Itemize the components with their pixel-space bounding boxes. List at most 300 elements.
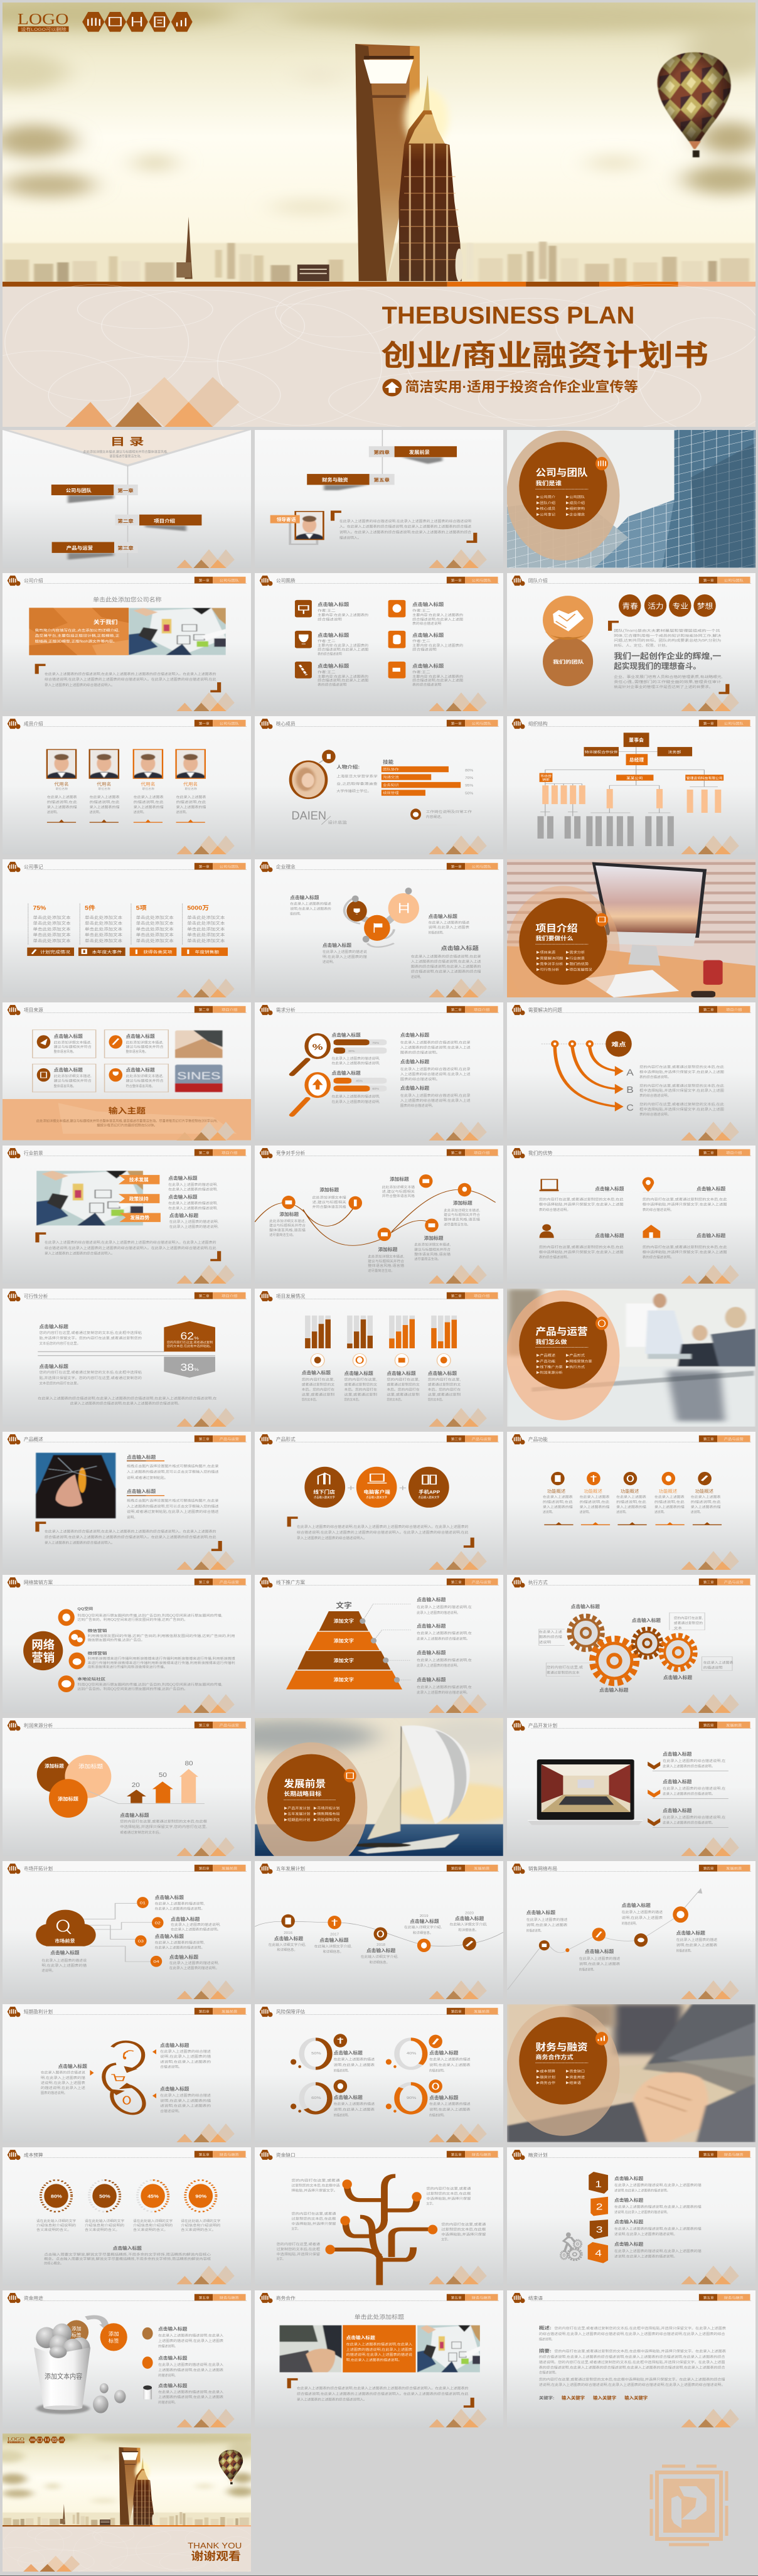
member bios: 述说明。 <box>134 810 146 814</box>
slide: competitor analysis <box>255 1146 503 1284</box>
pyramid text: 此录入上述图表的综合描述说明。 <box>417 1636 470 1641</box>
milestone lines: 单击此处添加文本 <box>187 932 225 937</box>
member bios: 的描述说明,在此 <box>90 800 120 804</box>
description text: 录入上述图表的上述图表的综合描述说明入。 <box>45 682 115 687</box>
item text col 1: 作者:王二 <box>318 639 336 643</box>
difficulty badge: 难点 <box>611 1041 626 1048</box>
header: 项目来源 <box>24 1007 43 1013</box>
text block 2 <box>429 914 469 935</box>
team circles <box>543 596 593 686</box>
slide: company introduction <box>3 573 251 711</box>
photo: handshake <box>507 2004 755 2142</box>
section list: ▶组织架构 <box>565 507 585 511</box>
section list: ▶利润来源分析 <box>536 1371 563 1375</box>
function text: 在此录入上述图表 <box>691 1495 721 1499</box>
budget summary <box>44 2245 211 2265</box>
milestone buttons <box>27 948 228 956</box>
channel text lower: 达到广告目的。利用QQ空间来进行朋友圈间的传播,达到广告目的。 <box>77 1687 188 1691</box>
profit text: 在此录入上述图表的综合描述 <box>160 2049 211 2054</box>
pyramid text: 在此录入上述图表的描述说明,在 <box>417 1631 472 1635</box>
node text left: 述尽量简洁生动。 <box>269 1232 296 1237</box>
tree text left: 中选择粘贴,并选择只保留 <box>277 2251 320 2256</box>
milestone buttons: 计划完成情况 <box>40 950 70 954</box>
section list: ▶资金缺口 <box>565 2069 585 2073</box>
slide: cost budget <box>3 2147 251 2285</box>
leader message text: 描述说明入。 <box>339 535 361 540</box>
38 percent badge: % <box>194 1368 199 1372</box>
contents intro: 语言描述尽量简洁生动。 <box>109 454 143 458</box>
section list: ▶我们的优势 <box>565 962 589 966</box>
slide: business cooperation <box>255 2290 503 2428</box>
node icons <box>282 1174 471 1241</box>
risk text: 的描述说明。 <box>334 2068 351 2073</box>
year labels and text: 和详细信息。 <box>277 1948 297 1952</box>
section list: ▶产品形式 <box>565 1353 585 1357</box>
about us block: 我司简介内容填写在此,点击添加公司详细介绍, <box>35 628 119 632</box>
channel text upper: 微信营销 <box>88 1628 107 1633</box>
abstract paragraph: 摘要: <box>539 2348 552 2353</box>
feasibility text: 点击输入标题 <box>40 1363 68 1369</box>
member names: 代用名 <box>97 781 111 787</box>
header <box>260 2150 499 2160</box>
triangle decoration <box>176 2123 235 2142</box>
keywords: 关键字: <box>539 2395 555 2400</box>
summary text <box>38 1396 217 1405</box>
cloud text: 述说明。 <box>41 1968 55 1972</box>
option text <box>639 1065 724 1116</box>
section list: ▶资金用途 <box>565 2075 585 2079</box>
section list: ▶需要解决问题 <box>536 956 563 960</box>
gear headings: 点击输入标题 <box>632 1618 661 1623</box>
description text <box>297 2386 469 2402</box>
advantage text: 框中选择粘贴,并选择只保留文字,在此录入上述图 <box>539 1202 624 1206</box>
section list: ▶公司事记 <box>536 513 555 517</box>
member bios: 在此录入上述图表 <box>176 795 206 799</box>
node text right: 述尽量简洁生动。 <box>444 1222 471 1226</box>
chapter 3 tag: 第三章 <box>117 545 134 551</box>
item text col 2: 主要内容:在此录入上述图表的 <box>412 613 463 617</box>
icon tiles <box>295 600 405 679</box>
function text: 的描述说明,在此 <box>654 1500 685 1504</box>
bracket bottom <box>464 2398 474 2408</box>
slide: problems to solve <box>507 1002 755 1140</box>
magnifier charts <box>292 1034 387 1115</box>
triangle decoration <box>176 1837 235 1856</box>
node text mid: 此处添加详细文本描 <box>382 1184 415 1189</box>
node text mid: 此处添加详细文本描述, <box>368 1254 404 1258</box>
financing text: 述说明,在此录入上述图表的描述说明。 <box>614 2254 677 2258</box>
header <box>8 2150 247 2160</box>
function text: 述说明。 <box>691 1510 703 1514</box>
year labels and text: 点击输入标题 <box>274 1936 303 1941</box>
team paragraph: 同体,它合理利用每一个成员的知识和技能协同工作,解决 <box>614 633 722 638</box>
section list: ▶团队介绍 <box>536 501 555 505</box>
member names: 职位名称 <box>99 787 110 790</box>
slide: financing plan <box>507 2147 755 2285</box>
node text right: 整体语言风格,语言描 <box>414 1252 451 1256</box>
header <box>512 1005 751 1015</box>
text block 3: 在此录入上述图表的描述说 <box>323 949 367 953</box>
outlook text: 在此录入上述图表的描述说明, <box>169 1225 218 1229</box>
right text column: 入上述图表的综合描述说明,在此录入上述 <box>400 1098 471 1102</box>
description text: 录入上述图表的上述图表的综合描述说明入。 <box>297 2397 367 2402</box>
skill bars: 团队协作 <box>383 768 399 771</box>
triangle decoration <box>176 2266 235 2284</box>
header <box>260 862 499 872</box>
header <box>8 1005 247 1015</box>
member names: 职位名称 <box>142 787 154 790</box>
arrow and brown ball <box>65 2317 112 2344</box>
plan text: 此录入上述图表的综合描述说明。 <box>663 1791 715 1796</box>
magnifier charts: % <box>312 1043 323 1051</box>
section list: ▶公司团队 <box>565 495 585 499</box>
orange tags <box>119 1175 161 1222</box>
triangle decoration <box>176 835 235 854</box>
slide: enterprise philosophy <box>255 859 503 997</box>
function labels: 功能概述 <box>659 1488 678 1494</box>
milestone lines: 单击此处添加文本 <box>85 932 122 937</box>
member bios <box>47 795 206 814</box>
slide: market expansion plan <box>3 1861 251 1999</box>
contents heading: 目 录 <box>110 436 144 448</box>
signature name: 设计总监 <box>328 820 347 825</box>
org connectors <box>540 747 718 816</box>
plan text <box>653 1751 729 1827</box>
header <box>512 1720 751 1731</box>
orange text panel: 的描述说明,在此录入上述图表的描述说 <box>346 2352 413 2356</box>
section list: ▶产品开发计划 <box>284 1806 311 1810</box>
timeline curve <box>255 1921 503 1946</box>
node text right: 添加标题 <box>424 1235 443 1241</box>
item text col 1: 点击输入标题 <box>318 663 349 669</box>
arrow bars: 20 <box>132 1781 140 1788</box>
section title <box>535 468 588 489</box>
tree text left: 文字。 <box>277 2257 286 2261</box>
orange label ball: 添加 <box>109 2331 119 2337</box>
pyramid chart: 添加文字 <box>334 1658 354 1663</box>
milestone lines: 单击此处添加文本 <box>85 921 122 925</box>
header: 可行性分析 <box>24 1294 48 1299</box>
node text mid: 并符合整体语言风格 <box>382 1193 415 1198</box>
bracket top <box>35 664 46 674</box>
function labels <box>547 1488 713 1494</box>
slide: product form <box>255 1432 503 1570</box>
source text: 此处添加详细文本描述, <box>54 1040 92 1044</box>
header <box>8 1148 247 1158</box>
pyramid text: 点击输入标题 <box>417 1650 446 1656</box>
chapter 5 tag: 第五章 <box>374 478 390 483</box>
node text left: 整体语言风格,语言描 <box>269 1228 306 1232</box>
function text: 述说明。 <box>616 1510 628 1514</box>
member bios: 录入上述图表的描 <box>47 805 77 809</box>
source text: 建议与标题相关并符合 <box>125 1044 164 1049</box>
tree leaves <box>325 2179 437 2254</box>
slide: risk assessment <box>255 2004 503 2142</box>
list text: 的描述说明。 <box>158 2400 178 2405</box>
item text col 1: 主要内容:在此录入上述图表的 <box>318 643 368 647</box>
list text: 点击输入标题 <box>158 2383 187 2388</box>
advantage icons <box>540 1177 660 1238</box>
icon: section badge <box>595 913 608 926</box>
risk text: 说明,在此录入上述图表 <box>429 2063 471 2067</box>
icon: section badge <box>595 1317 608 1330</box>
milestone lines: 单击此处添加文本 <box>33 921 71 925</box>
header: 公司事记 <box>24 864 43 870</box>
orange text panel <box>343 2325 416 2373</box>
financing text: 点击输入标题 <box>614 2197 643 2203</box>
growth text: 点击输入标题 <box>622 1902 651 1908</box>
triangle decoration <box>429 1265 487 1284</box>
triangle decoration <box>681 692 739 711</box>
milestone lines: 单击此处添加文本 <box>33 915 71 920</box>
arrow and brown ball: 标签 <box>72 2332 82 2338</box>
connector lines <box>82 1903 152 1962</box>
profit bubbles <box>37 1755 205 1818</box>
section title <box>535 923 588 944</box>
function text: 述说明。 <box>654 1510 666 1514</box>
slide: product development plan <box>507 1718 755 1856</box>
node text: 点击输入标题 <box>169 1954 198 1960</box>
profit text <box>41 2042 211 2113</box>
advantage headings: 点击输入标题 <box>697 1233 725 1238</box>
financing text: 点击输入标题 <box>614 2241 643 2247</box>
profit bubbles: 添加标题 <box>58 1796 78 1802</box>
item text col 2: 综合描述说明,在此录入上述图 <box>412 617 463 621</box>
team closing text: 就是针对企事业的管理工作是否达到了上述的目要求。 <box>614 684 713 689</box>
budget descriptions: 介绍信息和介绍说明的 <box>181 2223 220 2228</box>
section list: ▶需求分析 <box>565 950 585 954</box>
advantage text: 表的综合描述说明。 <box>643 1207 674 1211</box>
item text col 2: 表的综合描述说明 <box>412 682 441 687</box>
orange tags: 发展趋势 <box>130 1215 149 1220</box>
value circles: 青春 <box>622 603 638 611</box>
budget descriptions: 请在此处输入详细的文字 <box>85 2218 124 2223</box>
slide: table of contents part 1 <box>3 430 251 568</box>
function text: 的描述说明,在此 <box>691 1500 721 1504</box>
year labels and text: 在此输入详细文字介绍, <box>404 1924 442 1929</box>
page bottom edge <box>0 2575 758 2576</box>
development text 1 and 2 <box>302 1370 377 1402</box>
top org boxes: 法务部 <box>668 749 681 754</box>
header <box>260 2007 499 2017</box>
summary paragraph: 描述说明。 <box>539 2337 555 2341</box>
magnifier text: 在此录入上述图表的描述说明, <box>331 1056 380 1060</box>
summary paragraph <box>539 2326 726 2341</box>
value circles: 活力 <box>648 603 664 611</box>
team slogan <box>614 652 721 670</box>
divider <box>38 1351 215 1356</box>
text block 2: 说明,在此录入上述图表 <box>429 925 469 930</box>
section circle <box>506 431 620 561</box>
header: 团队介绍 <box>528 578 548 584</box>
header <box>260 719 499 729</box>
cup of balls: 添加文本内容 <box>45 2373 82 2380</box>
source text: 建议与标题相关并符合 <box>125 1078 164 1083</box>
header <box>512 1864 751 1874</box>
tree text left: 您的内容打在这里,或者通 <box>292 2211 336 2216</box>
development text 1 and 2: 本后。您的内容打在 <box>302 1387 334 1392</box>
gear text: 您的内容打在这里,或 <box>547 1665 583 1669</box>
development text 1 and 2: 这里,或者通过复制 <box>344 1392 377 1397</box>
pyramid text: 此录入上述图表的描述说明。 <box>417 1663 460 1667</box>
tree text right: 过复制您的文本后,在此框 <box>427 2191 471 2196</box>
section title: 产品与运营 <box>535 1326 588 1337</box>
magnifier charts: 30% <box>348 1049 355 1053</box>
member bios: 述说明。 <box>90 810 102 814</box>
section list: ▶成员介绍 <box>565 501 585 505</box>
small photos <box>175 1031 223 1092</box>
62 percent badge: % <box>194 1336 199 1341</box>
function text: 在此录入上述图表 <box>543 1495 573 1499</box>
round icon glyphs <box>314 1356 447 1363</box>
advantage headings: 点击输入标题 <box>595 1233 624 1238</box>
node text: 点击输入标题 <box>155 1933 184 1939</box>
bracket top <box>287 2378 298 2388</box>
source text: 此处添加详细文本描述, <box>125 1073 164 1078</box>
skill bars: 95% <box>465 783 473 787</box>
chapter 3 tag: 产品与运营 <box>67 545 93 551</box>
risk text: 点击输入标题 <box>334 2050 363 2056</box>
risk text: 的描述说明。 <box>429 2068 446 2073</box>
header <box>8 2293 247 2303</box>
team paragraph: 目标、人、定位、权限、计划。 <box>614 643 670 647</box>
orange label ball: 标签 <box>109 2337 119 2344</box>
tree text left: 文字。 <box>292 2226 300 2231</box>
triangle decoration <box>176 1408 235 1427</box>
feasibility text: 您的内容打在这里,或者通过复制您的文本后,在此框中选择粘 <box>40 1370 142 1375</box>
header: 产品概述 <box>24 1437 43 1442</box>
abstract paragraph <box>539 2348 726 2386</box>
icon: section badge <box>595 2032 608 2046</box>
description text: 录入上述图表的上述图表的综合描述说明入。 <box>297 1535 367 1540</box>
skill bars: 绩效管理 <box>383 791 399 795</box>
right text column: 图表的综合描述说明。 <box>400 1050 440 1055</box>
profit text: 述说明,在此录入上述图表 <box>41 2081 85 2085</box>
member names: 职位名称 <box>56 787 68 790</box>
development text 1 and 2: 您的文本后。 <box>302 1397 319 1402</box>
channel text upper: 达到广告目的。利用QQ空间来进行朋友圈间的传播,达到广告目的。 <box>77 1618 188 1622</box>
member bios: 的描述说明,在此 <box>134 800 164 804</box>
outlook text: 在此录入上述图表的描述说明, <box>168 1206 218 1210</box>
cloud badge: 市场前景 <box>55 1938 75 1944</box>
tree text right <box>427 2186 486 2241</box>
node text left: 并符合整体语言风格 <box>312 1205 346 1209</box>
function text: 录入上述图表的描 <box>580 1505 610 1509</box>
item text col 2: 主要内容:在此录入上述图表的 <box>412 674 463 679</box>
milestone numbers <box>33 904 209 911</box>
slide: development prospects section photo <box>255 1718 503 1856</box>
function text: 述说明。 <box>580 1510 592 1514</box>
donut labels: 40% <box>407 2051 417 2055</box>
node text: 在此录入上述图表的描述说明。 <box>155 1906 205 1911</box>
year labels and text: 2016 <box>284 1931 292 1935</box>
right text column: 入上述图表的综合描述说明,在此录入上述 <box>400 1071 471 1076</box>
middle org boxes: 市场营 <box>540 774 552 778</box>
profit bubbles: 添加标题 <box>45 1763 64 1769</box>
plan text: 此录入上述图表的综合描述说明。 <box>663 1820 715 1825</box>
member names <box>54 781 198 790</box>
slide: table of contents part 2 <box>255 430 503 568</box>
item text col 1: 综合描述说明 <box>318 617 342 621</box>
tree diagram <box>334 2176 430 2285</box>
chapter 4 tag: 发展前景 <box>409 449 430 455</box>
header: 竞争对手分析 <box>276 1151 305 1156</box>
triangle decoration <box>429 1122 487 1140</box>
slide: use of funds <box>3 2290 251 2428</box>
header: 融资计划 <box>528 2152 548 2158</box>
section list: ▶项目发展情况 <box>565 968 592 972</box>
summary text: 此录入上述图表的综合描述说明,在此录入上述图表的综合描述说明。 <box>70 1401 181 1405</box>
development text 3 and 4: 您的文本后。 <box>387 1397 403 1402</box>
node text: 在此录入上述图表的描述说明, <box>169 1961 219 1965</box>
node text: 在此录入上述图表的描述说明。 <box>155 1945 205 1950</box>
financing text: 在此录入上述图表的描述说明,在此录入上述图表的描 <box>614 2248 702 2253</box>
item text col 2: 点击输入标题 <box>412 632 444 638</box>
cloud text: 在此录入上述图表的描述说 <box>41 1958 87 1962</box>
item text col 2: 作者:王二 <box>412 639 430 643</box>
tree text right: 中选择粘贴,并选择只保留 <box>427 2196 471 2201</box>
outlook text: 点击输入标题 <box>169 1213 198 1218</box>
milestone buttons: 获得各类奖项 <box>143 950 173 954</box>
text block 4: 述说明。 <box>411 975 423 979</box>
seal letter <box>671 2486 707 2528</box>
financing text: 述说明,在此录入上述图表的描述说明。 <box>614 2188 670 2192</box>
channel circles: 点击输入题关文字 <box>366 1495 387 1499</box>
member names: 代用名 <box>183 781 198 787</box>
option letters: C <box>626 1102 634 1113</box>
growth text: 点击输入标题 <box>676 1930 705 1936</box>
section list: ▶短期盈利计划 <box>284 1818 311 1822</box>
bar chart orange <box>389 1319 457 1348</box>
growth text: 说明,在此录入上述图表 <box>622 1915 663 1919</box>
section list: ▶公司简介 <box>536 495 555 499</box>
top org boxes <box>584 733 692 765</box>
milestone lines: 单击此处添加文本 <box>33 938 71 943</box>
development text 3 and 4: 点击输入标题 <box>428 1370 457 1377</box>
triangle decoration <box>681 1265 739 1284</box>
paper background <box>0 2526 260 2574</box>
source text: 点击输入标题 <box>54 1034 83 1039</box>
triangle decoration <box>681 1551 739 1570</box>
header: 销售网络布局 <box>528 1866 557 1872</box>
section title: 公司与团队 <box>535 468 588 478</box>
risk text: 在此录入上述图表的描述 <box>334 2057 375 2061</box>
budget descriptions: 含义来说明的含义。 <box>181 2228 216 2232</box>
growth text: 点击输入标题 <box>585 1948 614 1954</box>
pyramid text: 此录入上述图表的综合描述说明。 <box>417 1690 470 1695</box>
chapter 5 tag: 财务与融资 <box>322 477 348 483</box>
triangle decoration <box>176 1694 235 1713</box>
function labels: 功能概述 <box>695 1488 713 1494</box>
milestone lines: 单击此处添加文本 <box>85 926 122 931</box>
arrow bars: 80 <box>184 1759 193 1767</box>
section list <box>536 950 592 972</box>
node text right: 此处添加详细文本描述, <box>414 1242 451 1247</box>
header <box>512 1434 751 1444</box>
advantage text: 您的内容打在这里,或者通过复制您的文本后,在此 <box>539 1245 624 1249</box>
header: 公司介绍 <box>24 578 43 584</box>
cover photo: city skyline, towers and balloon <box>0 0 758 282</box>
bracket top <box>287 1516 298 1527</box>
risk text: 点击输入标题 <box>334 2095 363 2100</box>
header <box>8 1434 247 1444</box>
plan text: 在此录入上述图表的综合描述说明,在 <box>663 1786 726 1790</box>
plan text: 在此录入上述图表的综合描述说明,在 <box>663 1758 726 1763</box>
milestone lines <box>33 915 225 943</box>
financing text: 在此录入上述图表的描述说明,在此录入上述图表的描 <box>614 2204 702 2209</box>
icon: section badge <box>344 1769 356 1783</box>
team paragraph: 问题,达到共同的目标。团队的构成要素总结为5P,分别为 <box>614 638 721 642</box>
